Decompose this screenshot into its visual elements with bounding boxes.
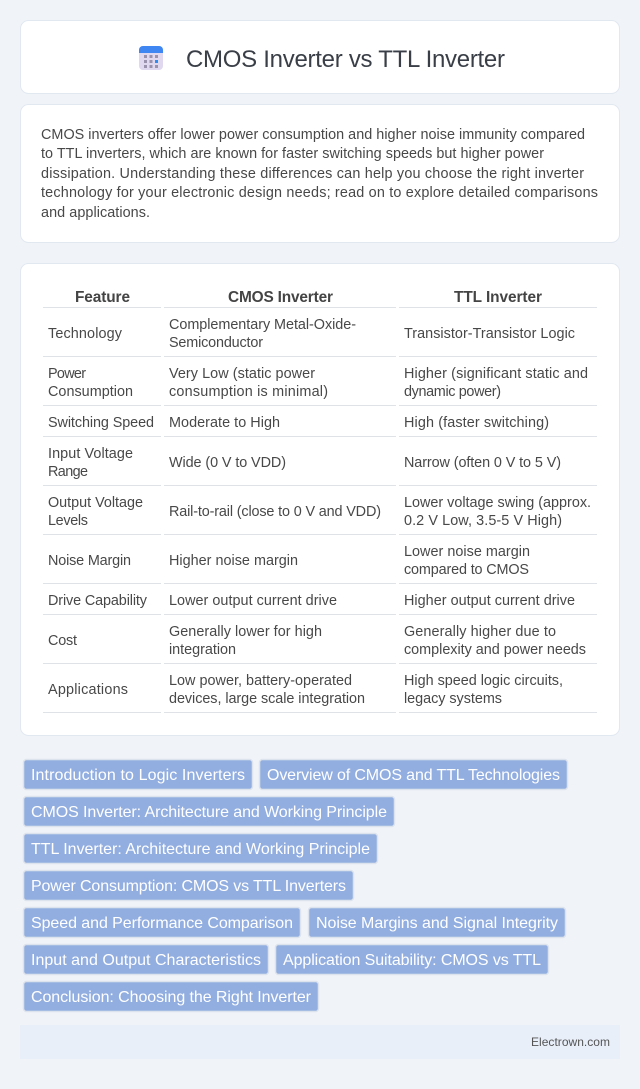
row: power consumption: Higher (significant static and bbox=[404, 366, 588, 382]
row: input voltage range: Range bbox=[48, 464, 88, 480]
tag: introduction bbox=[24, 760, 252, 790]
topic tags bbox=[24, 760, 568, 1012]
table header row: CMOS Inverter bbox=[228, 289, 333, 306]
row: technology: Semiconductor bbox=[169, 335, 263, 351]
tag: conclusion bbox=[24, 982, 318, 1012]
tag: CMOS architecture: CMOS Inverter: Architecture and Working Principle bbox=[31, 804, 387, 821]
tag: power consumption: Power Consumption: CMOS vs TTL Inverters bbox=[31, 878, 346, 895]
row: switching speed: Switching Speed bbox=[48, 415, 154, 431]
row: switching speed: High (faster switching) bbox=[404, 415, 549, 431]
row: output voltage levels: Rail-to-rail (close to 0 V and VDD) bbox=[169, 504, 381, 520]
row: technology: Transistor-Transistor Logic bbox=[404, 326, 575, 342]
tag: overview: Overview of CMOS and TTL Technologies bbox=[267, 767, 560, 784]
table header row: Feature bbox=[75, 289, 130, 306]
row: cost: Generally higher due to bbox=[404, 624, 556, 640]
intro text: dissipation. Understanding these differences can help you choose the right inverter bbox=[41, 166, 584, 182]
intro text: technology for your electronic design needs; read on to explore detailed comparisons bbox=[41, 185, 598, 201]
row: noise margin: Higher noise margin bbox=[169, 553, 298, 569]
intro text: and applications. bbox=[41, 205, 150, 221]
row: drive capability: Drive Capability bbox=[48, 593, 148, 609]
tag: speed bbox=[24, 908, 300, 938]
tag: power consumption bbox=[24, 870, 354, 900]
row: switching speed bbox=[43, 415, 597, 437]
row: noise margin: Lower noise margin bbox=[404, 544, 530, 560]
row: switching speed: Moderate to High bbox=[169, 415, 280, 431]
row: input voltage range: Wide (0 V to VDD) bbox=[169, 455, 286, 471]
tag: speed: Speed and Performance Comparison bbox=[31, 915, 293, 932]
tag: input output bbox=[24, 944, 268, 974]
row: applications: legacy systems bbox=[404, 691, 502, 707]
row: noise margin: compared to CMOS bbox=[404, 562, 529, 578]
row: noise margin: Noise Margin bbox=[48, 553, 131, 569]
row: applications bbox=[43, 673, 597, 713]
row: output voltage levels bbox=[43, 495, 597, 535]
row: power consumption: Power bbox=[48, 366, 86, 382]
panel: comparison table bbox=[20, 264, 620, 736]
panel: introduction bbox=[20, 104, 620, 242]
row: cost: Generally lower for high bbox=[169, 624, 322, 640]
tag: TTL architecture bbox=[24, 834, 378, 864]
row: applications: High speed logic circuits, bbox=[404, 673, 563, 689]
title: CMOS Inverter vs TTL Inverter bbox=[186, 46, 505, 73]
icon: calendar grid bbox=[139, 46, 163, 70]
row: input voltage range: Input Voltage bbox=[48, 446, 133, 462]
row: power consumption bbox=[43, 366, 597, 406]
row: output voltage levels: 0.2 V Low, 3.5-5 V High) bbox=[404, 513, 562, 529]
row: power consumption: Very Low (static power bbox=[169, 366, 315, 382]
row: cost bbox=[43, 624, 597, 664]
intro text bbox=[41, 127, 598, 221]
row: output voltage levels: Levels bbox=[48, 513, 88, 529]
row: technology bbox=[43, 317, 597, 357]
row: input voltage range: Narrow (often 0 V to 5 V) bbox=[404, 455, 561, 471]
row: drive capability: Higher output current drive bbox=[404, 593, 575, 609]
tag: noise margins bbox=[308, 908, 566, 938]
row: drive capability: Lower output current drive bbox=[169, 593, 337, 609]
footer bbox=[20, 1025, 620, 1059]
row: technology: Technology bbox=[48, 326, 123, 342]
row: noise margin bbox=[43, 544, 597, 584]
intro text: CMOS inverters offer lower power consumption and higher noise immunity compared bbox=[41, 127, 585, 143]
row: applications: devices, large scale integration bbox=[169, 691, 365, 707]
row: output voltage levels: Lower voltage swing (approx. bbox=[404, 495, 591, 511]
tag: conclusion: Conclusion: Choosing the Right Inverter bbox=[31, 989, 312, 1006]
row: input voltage range bbox=[43, 446, 597, 486]
tag: application suitability bbox=[276, 944, 548, 974]
header panel bbox=[20, 20, 620, 94]
table header row bbox=[43, 289, 597, 308]
row: cost: Cost bbox=[48, 633, 77, 649]
tag: overview bbox=[260, 760, 568, 790]
tag: CMOS architecture bbox=[24, 796, 394, 826]
tag: input output: Input and Output Characteristics bbox=[31, 952, 261, 969]
row: applications: Low power, battery-operated bbox=[169, 673, 352, 689]
footer: Electrown.com bbox=[531, 1035, 610, 1049]
row: cost: complexity and power needs bbox=[404, 642, 586, 658]
row: technology: Complementary Metal-Oxide- bbox=[169, 317, 356, 333]
row: drive capability bbox=[43, 593, 597, 615]
row: output voltage levels: Output Voltage bbox=[48, 495, 143, 511]
row: power consumption: Consumption bbox=[48, 384, 133, 400]
tag: application suitability: Application Suitability: CMOS vs TTL bbox=[283, 952, 541, 969]
tag: introduction: Introduction to Logic Inverters bbox=[31, 767, 245, 784]
row: cost: integration bbox=[169, 642, 236, 658]
tag: noise margins: Noise Margins and Signal Integrity bbox=[316, 915, 558, 932]
tag: TTL architecture: TTL Inverter: Architecture and Working Principle bbox=[31, 841, 370, 858]
row: applications: Applications bbox=[48, 682, 128, 698]
table header row: TTL Inverter bbox=[454, 289, 542, 306]
row: power consumption: dynamic power) bbox=[404, 384, 501, 400]
row: power consumption: consumption is minimal) bbox=[169, 384, 328, 400]
intro text: to TTL inverters, which are known for faster switching speeds but higher power bbox=[41, 146, 544, 162]
